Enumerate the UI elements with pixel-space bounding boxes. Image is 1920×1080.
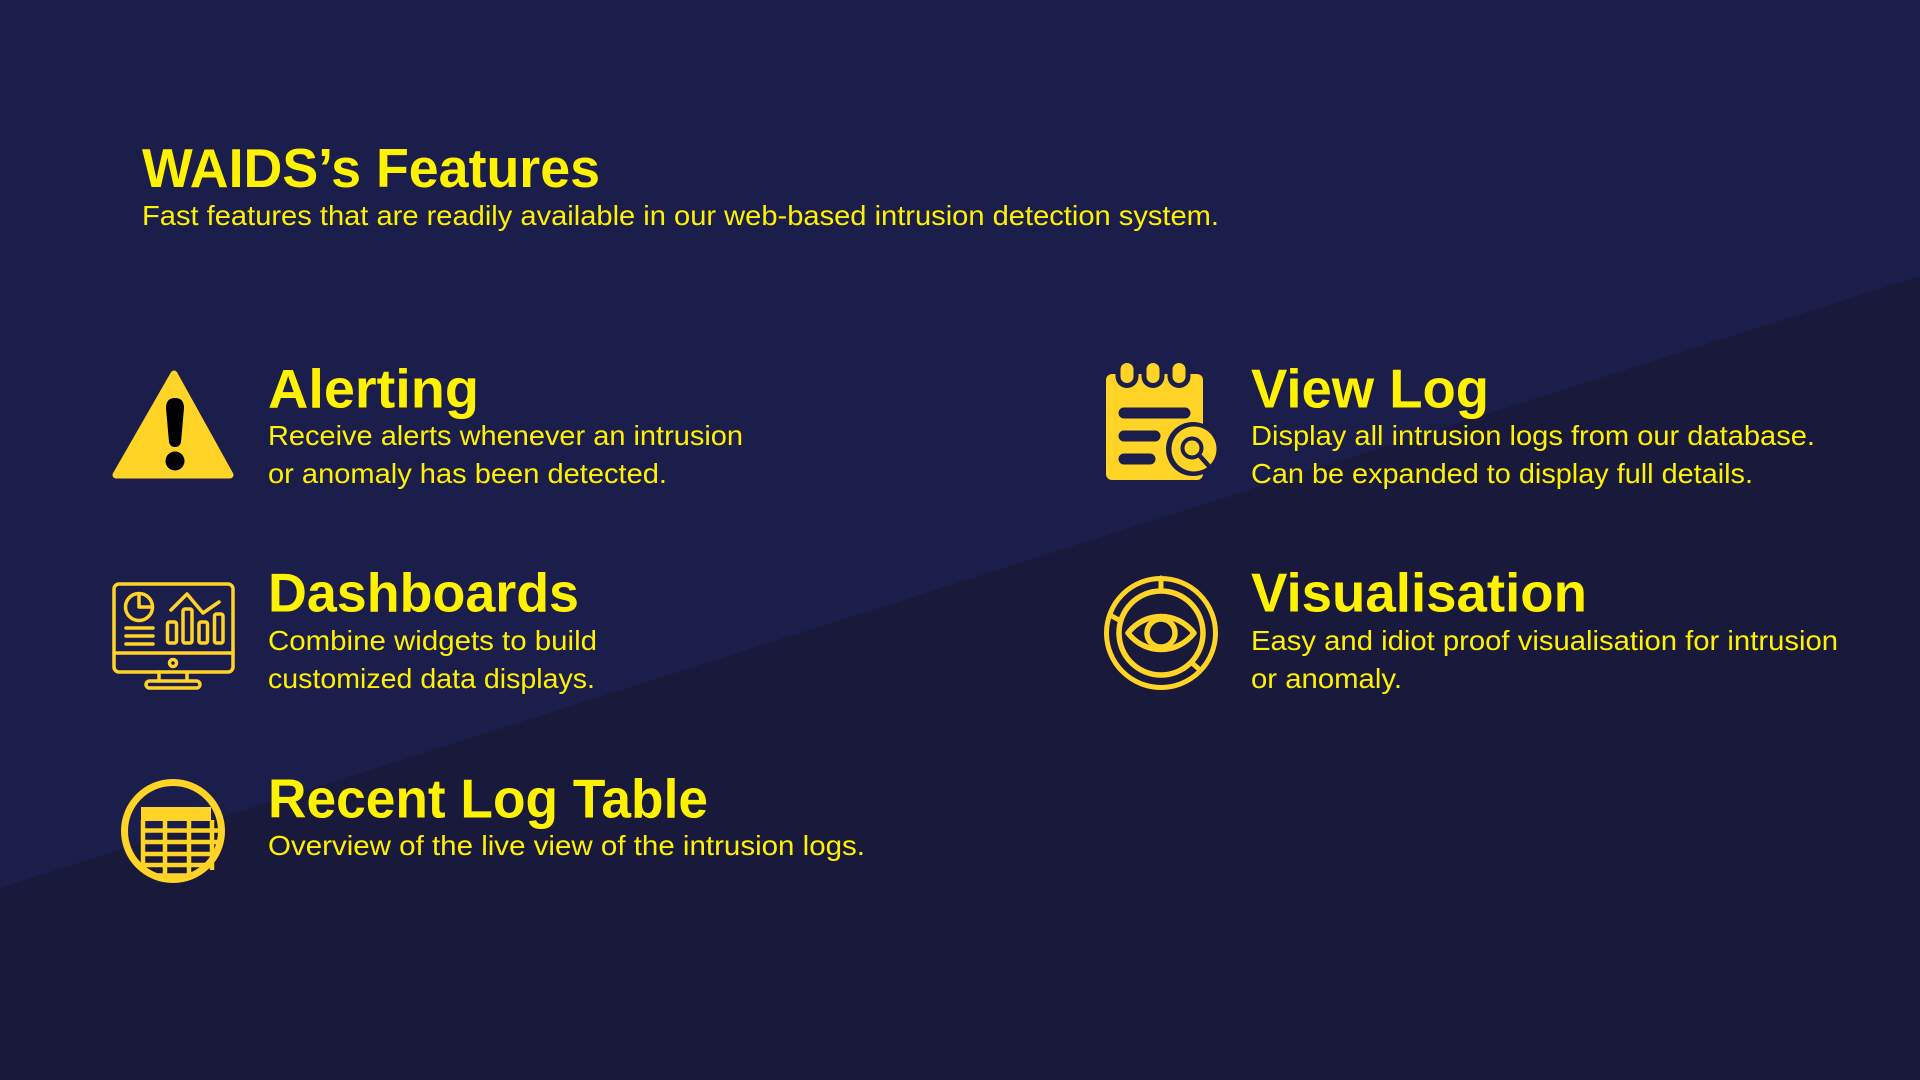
panel: alerting xyxy=(116,358,743,489)
panel: visualisation xyxy=(1106,562,1838,694)
description: Overview of the live view of the intrusion logs. xyxy=(268,830,865,861)
panel: recent log table xyxy=(124,768,865,880)
description: Easy and idiot proof visualisation for intrusion xyxy=(1251,625,1838,656)
title: WAIDS’s Features xyxy=(142,137,600,199)
heading: Dashboards xyxy=(268,562,579,624)
description: Combine widgets to build xyxy=(268,625,597,656)
panel: dashboards xyxy=(114,562,597,694)
icon: notepad with magnifier xyxy=(1106,355,1220,480)
icon: monitor dashboard xyxy=(114,584,233,688)
icon: table in circle xyxy=(124,782,222,880)
panel: view log: Can be expanded to display full details. xyxy=(1251,458,1753,489)
panel: alerting: or anomaly has been detected. xyxy=(268,458,667,489)
heading: Visualisation xyxy=(1251,562,1587,624)
description: Receive alerts whenever an intrusion xyxy=(268,420,743,451)
icon: eye in rings xyxy=(1106,578,1216,688)
heading: Alerting xyxy=(268,358,479,420)
heading: Recent Log Table xyxy=(268,768,708,830)
icon: warning triangle xyxy=(116,374,230,475)
panel: view log xyxy=(1106,355,1815,489)
subtitle: Fast features that are readily available in our web-based intrusion detection system. xyxy=(142,200,1219,231)
heading: View Log xyxy=(1251,358,1489,420)
description: Display all intrusion logs from our database. xyxy=(1251,420,1815,451)
panel: visualisation: or anomaly. xyxy=(1251,663,1402,694)
title block xyxy=(142,137,1219,231)
panel: dashboards: customized data displays. xyxy=(268,663,595,694)
